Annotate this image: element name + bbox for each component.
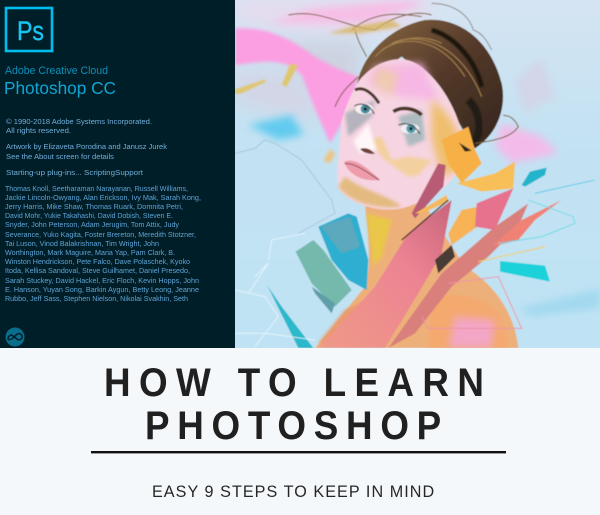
text: contributor names: Snyder, John Peterson, Adam Jerugim, Tom Attix, Judy	[5, 220, 179, 229]
paint washes	[235, 0, 600, 317]
title: PHOTOSHOP	[145, 404, 441, 448]
text: contributor names: Sarah Stuckey, David Hackel, Eric Floch, Kevin Hopps, John	[5, 276, 199, 285]
text: contributor names: Rubbo, Jeff Sass, Stephen Nielson, Nikolai Svakhin, Seth	[5, 294, 188, 303]
text: contributor names	[5, 184, 201, 303]
text: contributor names: David Mohr, Yukie Takahashi, David Dobish, Steven E.	[5, 211, 173, 220]
eyes and brows	[354, 89, 422, 134]
heading: Adobe Creative Cloud: Adobe Creative Cloud	[5, 65, 108, 77]
mouth	[344, 161, 380, 180]
icon: Creative Cloud logo	[6, 328, 24, 346]
text: contributor names: Jackie Lincoln-Owyang, Alan Erickson, Ivy Mak, Sarah Kong,	[5, 193, 201, 202]
text: loading status: Starting-up plug-ins... ScriptingSupport	[6, 168, 144, 177]
text: artwork credit: Artwork by Elizaveta Porodina and Janusz Jurek	[6, 142, 167, 151]
text: artwork credit	[6, 142, 167, 161]
text: contributor names: Winston Hendrickson, Pete Falco, Dave Polaschek, Kyoko	[5, 257, 190, 266]
icon: Ps logo	[6, 8, 52, 51]
subtitle: EASY 9 STEPS TO KEEP IN MIND	[152, 482, 434, 501]
text: contributor names: Severance, Yuko Kagita, Foster Brereton, Meredith Stotzner,	[5, 230, 196, 239]
heading: Photoshop CC: Photoshop CC	[4, 78, 116, 98]
text: copyright: All rights reserved.	[6, 126, 71, 135]
neck and shoulders	[315, 200, 518, 348]
lightning lines	[235, 140, 595, 347]
text: artwork credit: See the About screen for details	[6, 152, 114, 161]
cyan shards left	[267, 213, 368, 348]
image: portrait artwork	[235, 0, 600, 348]
text: contributor names: Jerry Harris, Mike Shaw, Thomas Ruark, Domnita Petri,	[5, 202, 183, 211]
pink and orange shards	[318, 127, 562, 348]
text: contributor names: Thomas Knoll, Seetharaman Narayanan, Russell Williams,	[5, 184, 188, 193]
artwork background	[235, 0, 600, 348]
text: contributor names: Worthington, Mark Maguire, Maria Yap, Pam Clark, B.	[5, 248, 175, 257]
text: contributor names: E. Hanson, Yuyan Song, Barkin Aygun, Betty Leong, Jeanne	[5, 285, 199, 294]
title: HOW TO LEARN	[104, 361, 484, 405]
panel: splash screen	[0, 0, 235, 348]
hair	[288, 3, 518, 148]
text: copyright	[6, 117, 152, 135]
text: contributor names: Itoda, Kellisa Sandoval, Steve Guilhamet, Daniel Presedo,	[5, 266, 190, 275]
text: copyright: © 1990-2018 Adobe Systems Incorporated.	[6, 117, 152, 126]
nose shadow	[360, 148, 375, 154]
icon: Ps logo: Ps	[17, 16, 44, 46]
face	[337, 59, 465, 210]
divider line	[91, 451, 506, 453]
title	[104, 361, 484, 448]
text: contributor names: Tai Luson, Vinod Balakrishnan, Tim Wright, John	[5, 239, 159, 248]
